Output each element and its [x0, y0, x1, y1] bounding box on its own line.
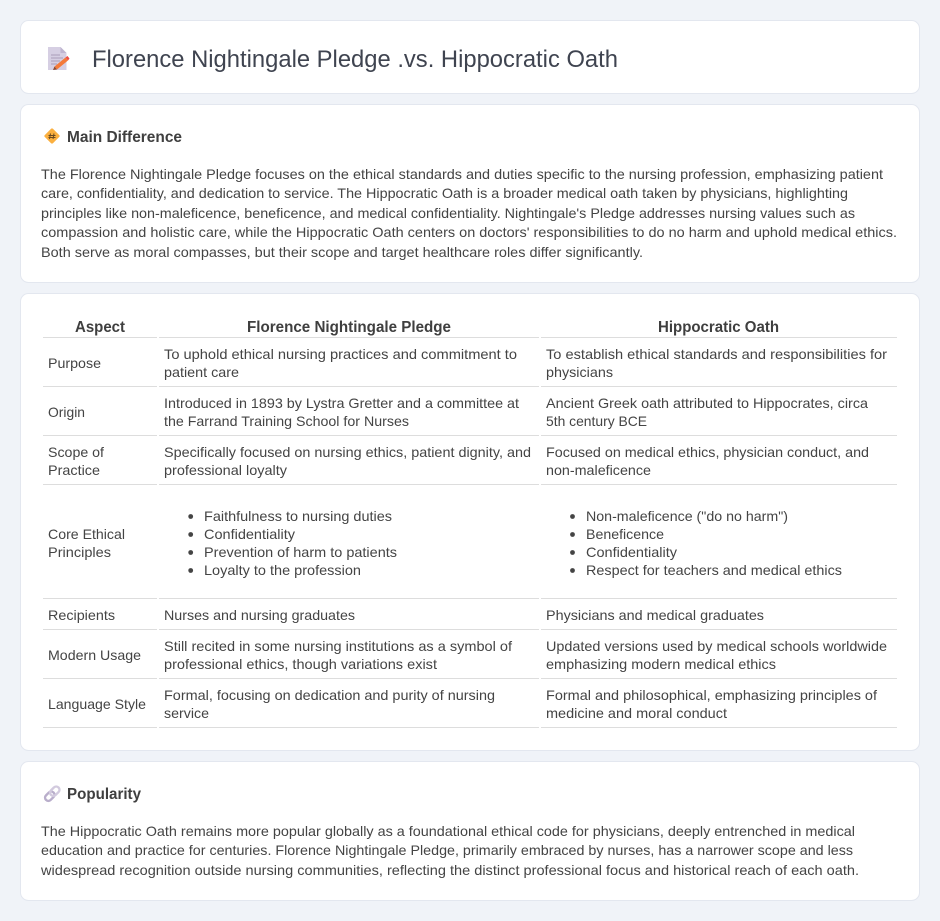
row: language style: medicine and moral conduct [546, 705, 727, 721]
row: core ethical principles: Principles [48, 544, 111, 560]
row: origin: Origin [48, 404, 85, 420]
row: scope of practice: Practice [48, 462, 100, 478]
row: origin: 5th century BCE [546, 413, 647, 429]
panel: main difference [20, 104, 920, 282]
row: recipients [48, 607, 764, 623]
row: core ethical principles [48, 508, 842, 578]
table header row: Hippocratic Oath [658, 319, 779, 336]
list: hippocratic principles: Beneficence [586, 526, 664, 542]
text block: main difference paragraph [41, 166, 897, 260]
list: nightingale principles: Faithfulness to nursing duties [204, 508, 392, 524]
row: language style: Formal, focusing on dedication and purity of nursing [164, 687, 495, 703]
text block: main difference paragraph: care, confidentiality, and dedication to service. The Hippocratic Oath is a broader medical oath taken by physicians, highlighting [41, 185, 848, 201]
row: scope of practice: non-maleficence [546, 462, 651, 478]
row: modern usage: professional ethics, though variations exist [164, 656, 437, 672]
row: purpose: To establish ethical standards and responsibilities for [546, 346, 887, 362]
row: purpose: To uphold ethical nursing practices and commitment to [164, 346, 517, 362]
icon: document with pencil [48, 47, 70, 70]
row: recipients: Recipients [48, 607, 115, 623]
list: hippocratic principles: Non-maleficence ("do no harm") [586, 508, 788, 524]
text block: main difference paragraph: compassion and holistic care, while the Hippocratic Oath centers on doctors' responsibilities to do no harm and uphold medical ethics. [41, 224, 897, 240]
row: recipients: Physicians and medical graduates [546, 607, 764, 623]
panel: title header [20, 20, 920, 94]
title: Florence Nightingale Pledge .vs. Hippocratic Oath [92, 46, 618, 73]
row: modern usage: Modern Usage [48, 647, 141, 663]
row: scope of practice [48, 444, 869, 478]
row: origin: Introduced in 1893 by Lystra Gretter and a committee at [164, 395, 519, 411]
row: origin: the Farrand Training School for Nurses [164, 413, 409, 429]
text block: main difference paragraph: The Florence Nightingale Pledge focuses on the ethical standards and duties specific to the nursing profession, emphasizing patient [41, 166, 883, 182]
row: purpose: physicians [546, 364, 613, 380]
text block: popularity paragraph: The Hippocratic Oath remains more popular globally as a foundational ethical code for physicians, deeply entrenched in medical [41, 823, 855, 839]
list: hippocratic principles: Confidentiality [586, 544, 677, 560]
row: origin: Ancient Greek oath attributed to Hippocrates, circa [546, 395, 868, 411]
text block: main difference paragraph: principles like non-maleficence, beneficence, and medical confidentiality. Nightingale's Pledge addresses nursing values such as [41, 205, 855, 221]
row: core ethical principles: Core Ethical [48, 526, 125, 542]
list: nightingale principles: Confidentiality [204, 526, 295, 542]
row: origin [48, 395, 868, 429]
text block: popularity paragraph: widespread recognition outside nursing communities, reflecting the distinct professional focus and historical reach of each oath. [40, 862, 859, 878]
row: modern usage: Updated versions used by medical schools worldwide [546, 638, 887, 654]
row: purpose: patient care [164, 364, 239, 380]
panel: popularity [20, 762, 920, 900]
list: hippocratic principles [570, 508, 842, 578]
row: scope of practice: Scope of [48, 444, 104, 460]
list: nightingale principles: Loyalty to the profession [204, 562, 361, 578]
list: nightingale principles [188, 508, 397, 578]
row: language style: Formal and philosophical, emphasizing principles of [546, 687, 877, 703]
row: modern usage: Still recited in some nursing institutions as a symbol of [164, 638, 512, 654]
row: language style [48, 687, 877, 721]
list: nightingale principles: Prevention of harm to patients [204, 544, 397, 560]
row: recipients: Nurses and nursing graduates [164, 607, 355, 623]
row: language style: service [164, 705, 209, 721]
row: scope of practice: professional loyalty [164, 462, 287, 478]
icon: orange diamond sign [44, 128, 60, 144]
text block: popularity paragraph: education and practice for centuries. Florence Nightingale Pledge, primarily embraced by nurses, has a narrower scope and less [41, 842, 853, 858]
panel: comparison table [20, 294, 920, 750]
table header row [75, 319, 779, 336]
text block: main difference paragraph: Both serve as moral compasses, but their scope and target healthcare roles differ significantly. [41, 244, 643, 260]
row: scope of practice: Specifically focused on nursing ethics, patient dignity, and [164, 444, 531, 460]
row: purpose [48, 346, 887, 380]
table header row: Florence Nightingale Pledge [247, 319, 451, 336]
icon: chain link [44, 785, 61, 802]
heading: main difference: Main Difference [67, 129, 182, 146]
row: purpose: Purpose [48, 355, 101, 371]
text block: popularity paragraph [40, 823, 859, 878]
list: hippocratic principles: Respect for teachers and medical ethics [586, 562, 842, 578]
row: modern usage [48, 638, 887, 672]
row: language style: Language Style [48, 696, 146, 712]
row: scope of practice: Focused on medical ethics, physician conduct, and [546, 444, 869, 460]
row: modern usage: emphasizing modern medical ethics [546, 656, 776, 672]
table header row: Aspect [75, 319, 126, 336]
heading: popularity: Popularity [67, 786, 141, 803]
